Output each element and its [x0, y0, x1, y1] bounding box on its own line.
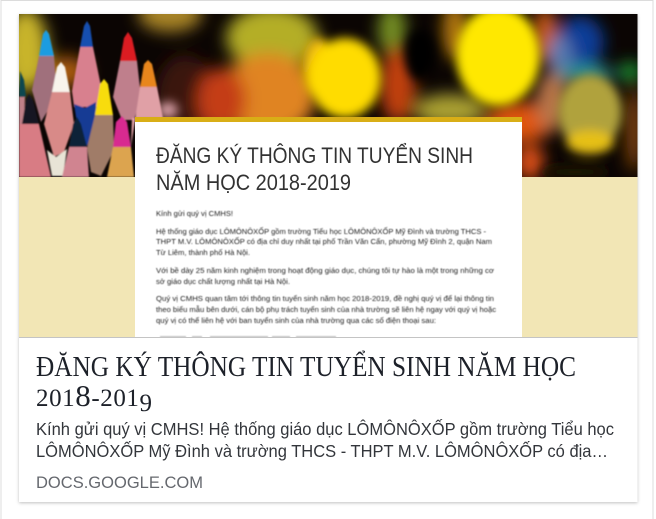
pencil: dark blue — [72, 21, 102, 107]
form body text: theo biểu mẫu bên dưới, cán bộ phụ trách tuyển sinh của nhà trường sẽ liên hệ ngay với quý vị hoặc — [156, 305, 497, 314]
form body text: sở giáo dục chất lượng nhất tại Hà Nội. — [156, 277, 290, 286]
pencil: navy — [62, 117, 89, 177]
form title — [156, 143, 473, 195]
form body text: Hệ thống giáo dục LÔMÔNÔXỐP gồm trường Tiểu học LÔMÔNÔXỐP Mỹ Đình và trường THCS - — [156, 226, 487, 236]
pencil: yellow — [87, 79, 114, 176]
form body text: Với bề dày 25 năm kinh nghiệm trong hoạt động giáo dục, chúng tôi tự hào là một trong những cơ — [156, 266, 494, 275]
pencil: red — [113, 32, 141, 120]
pencil: white — [44, 62, 74, 176]
caption: description — [36, 418, 614, 461]
pencil: magenta — [107, 116, 134, 177]
caption: headline: ĐĂNG KÝ THÔNG TIN TUYỂN SINH NĂM HỌC — [36, 351, 576, 383]
form body text: THPT M.V. LÔMÔNÔXỐP có địa chỉ duy nhất tại phố Trần Văn Cẩn, phường Mỹ Đình 2, quận Nam — [156, 236, 492, 246]
caption: description: LÔMÔNÔXỐP Mỹ Đình và trường THCS - THPT M.V. LÔMÔNÔXỐP có địa… — [36, 440, 608, 461]
caption: source domain: DOCS.GOOGLE.COM — [36, 473, 203, 492]
caption divider — [19, 337, 638, 338]
form body text: Quý vị CMHS quan tâm tới thông tin tuyển sinh năm học 2018-2019, đề nghị quý vị để lại thông tin — [156, 294, 494, 303]
photo: colored pencils and bokeh lights — [19, 14, 638, 177]
pencil: dark teal — [19, 71, 26, 124]
white form area — [135, 122, 522, 337]
form sheet — [135, 117, 522, 337]
form body text — [156, 210, 497, 325]
gold form accent — [135, 117, 522, 122]
clipped illegible form line — [160, 336, 336, 337]
pencil: light blue — [32, 30, 57, 122]
form title: NĂM HỌC 2018-2019 — [156, 170, 351, 195]
yellow page background — [19, 177, 638, 337]
caption: headline: 2018-201 — [36, 378, 139, 413]
pencil: orange — [131, 60, 163, 147]
pencil: blue core — [74, 102, 96, 146]
caption: headline: 9 — [140, 390, 152, 417]
form title: ĐĂNG KÝ THÔNG TIN TUYỂN SINH — [156, 143, 473, 168]
bokeh lights — [19, 14, 638, 177]
form body text: Kính gửi quý vị CMHS! — [156, 210, 233, 218]
caption: headline — [36, 351, 576, 417]
pencil: black — [19, 94, 51, 177]
form body text: quý vị có thể liên hệ với ban tuyển sinh của nhà trường qua các số điện thoại sau: — [156, 316, 436, 325]
form body text: Từ Liêm, thành phố Hà Nội. — [156, 248, 250, 257]
caption: description: Kính gửi quý vị CMHS! Hệ thống giáo dục LÔMÔNÔXỐP gồm trường Tiểu học — [36, 418, 614, 439]
pencils — [19, 21, 163, 177]
cover image — [4, 0, 642, 337]
